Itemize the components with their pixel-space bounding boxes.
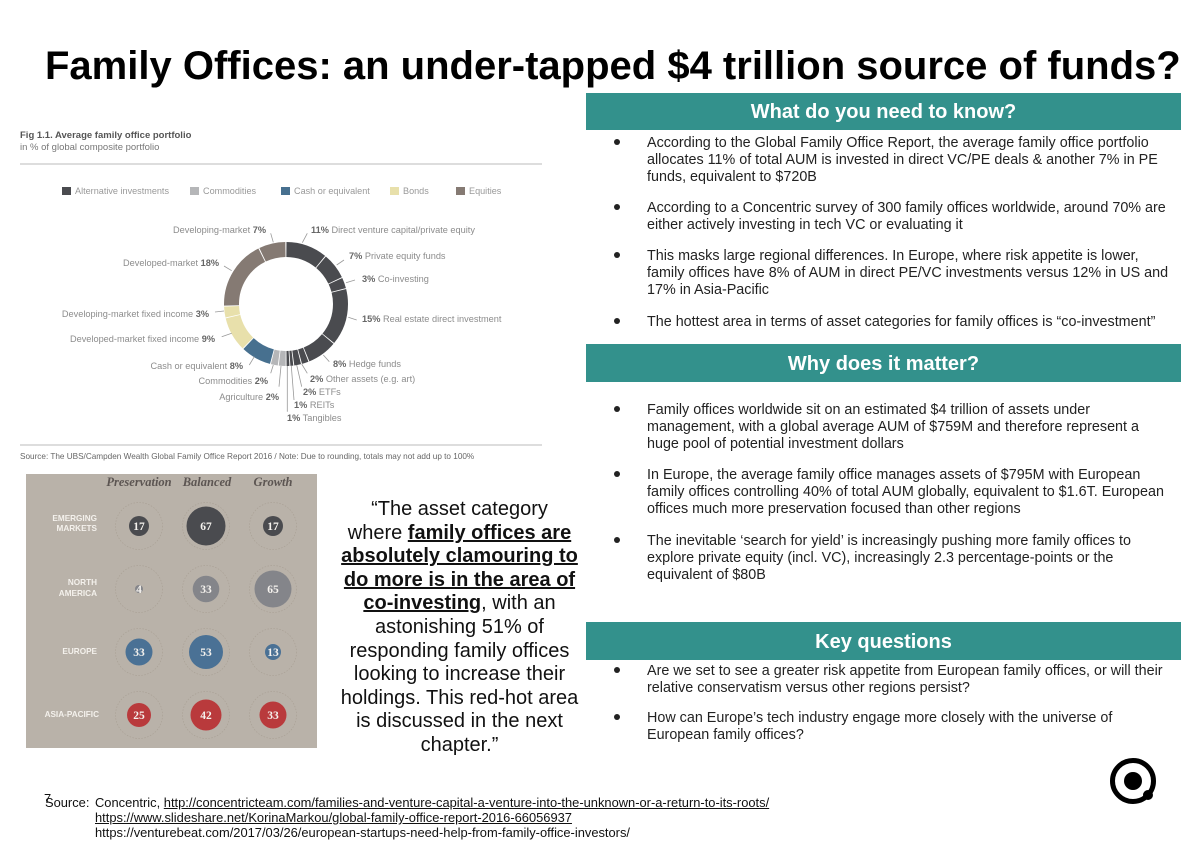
quote text block: responding family offices bbox=[350, 640, 569, 662]
figure heading: in % of global composite portfolio bbox=[20, 142, 159, 153]
bubble values: 42 bbox=[200, 710, 212, 722]
source references: https://www.slideshare.net/KorinaMarkou/global-family-office-report-2016-66056937 bbox=[95, 810, 572, 825]
bullet: regional differences: This masks large regional differences. In Europe, where risk appetite is lower, bbox=[647, 248, 1139, 264]
bullet: regional differences: family offices have 8% of AUM in direct PE/VC investments versus 12% in US and bbox=[647, 265, 1168, 281]
donut labels: right: 2% ETFs bbox=[303, 387, 341, 397]
bullet: engagement question: European family offices? bbox=[647, 727, 804, 743]
donut labels: right: 2% Other assets (e.g. art) bbox=[310, 374, 415, 384]
donut labels: right: 1% Tangibles bbox=[287, 413, 342, 423]
donut labels: right: 1% REITs bbox=[294, 400, 335, 410]
title: Family Offices: an under-tapped $4 trillion source of funds? bbox=[45, 44, 1181, 88]
row labels: MARKETS bbox=[57, 524, 98, 533]
bubble values: 53 bbox=[200, 647, 212, 659]
quote text block: astonishing 51% of bbox=[375, 616, 544, 638]
row labels: EUROPE bbox=[62, 647, 98, 656]
bullet: search for yield: explore private equity (incl. VC), increasingly 2.3 percentage-points or the bbox=[647, 550, 1113, 566]
heading: key questions bbox=[586, 622, 1181, 660]
quote text block: where family offices are bbox=[348, 522, 571, 544]
donut labels: right: 11% Direct venture capital/private equity bbox=[311, 225, 475, 235]
bullet: regional differences: 17% in Asia-Pacific bbox=[647, 282, 769, 298]
page number: 7 bbox=[44, 791, 51, 806]
bullet: regional differences bbox=[614, 248, 1168, 298]
heading: what do you need to know: What do you need to know? bbox=[751, 101, 1016, 123]
donut labels: right: 3% Co-investing bbox=[362, 274, 429, 284]
row labels: ASIA-PACIFIC bbox=[45, 710, 99, 719]
donut chart bbox=[232, 250, 340, 358]
bullet: worldwide assets bbox=[614, 402, 1139, 452]
bullet: engagement question bbox=[614, 710, 1112, 743]
bullet: average portfolio allocation bbox=[614, 135, 1158, 185]
donut labels: left: Developing-market fixed income 3% bbox=[62, 309, 209, 319]
quote text block: absolutely clamouring to bbox=[341, 545, 578, 567]
column headings: Preservation bbox=[106, 475, 172, 489]
bullet: Concentric survey: either actively investing in tech VC or evaluating it bbox=[647, 217, 963, 233]
bullet: co-investment: The hottest area in terms of asset categories for family offices is “co-investment” bbox=[647, 314, 1155, 330]
donut labels: left: Cash or equivalent 8% bbox=[151, 361, 243, 371]
bubble values: 33 bbox=[200, 584, 212, 596]
heading: why does it matter bbox=[586, 344, 1181, 382]
donut labels: left: Agriculture 2% bbox=[219, 392, 279, 402]
donut labels: left: Developed-market fixed income 9% bbox=[70, 334, 215, 344]
quote text block: holdings. This red-hot area bbox=[341, 687, 578, 709]
donut labels: right: 15% Real estate direct investment bbox=[362, 314, 502, 324]
icon: logo bbox=[1110, 758, 1156, 804]
bullet: search for yield: The inevitable ‘search for yield’ is increasingly pushing more family offices to bbox=[647, 533, 1131, 549]
bullet: risk appetite question bbox=[614, 663, 1163, 696]
row labels: AMERICA bbox=[59, 589, 97, 598]
quote text block: chapter.” bbox=[421, 734, 498, 756]
heading: key questions: Key questions bbox=[815, 631, 952, 653]
bullet: average portfolio allocation: allocates 11% of total AUM is invested in direct VC/PE deals & another 7% in PE bbox=[647, 152, 1158, 168]
source references: Source: bbox=[45, 795, 89, 810]
bubble values: 17 bbox=[267, 521, 279, 533]
column headings bbox=[106, 475, 292, 489]
donut labels: left: Developing-market 7% bbox=[173, 225, 266, 235]
donut labels: left bbox=[62, 225, 279, 402]
legend: Commodities bbox=[203, 186, 257, 196]
bullet: engagement question: How can Europe’s tech industry engage more closely with the universe of bbox=[647, 710, 1112, 726]
column headings: Balanced bbox=[182, 475, 232, 489]
row labels bbox=[45, 514, 99, 719]
bullet: Concentric survey: According to a Concentric survey of 300 family offices worldwide, around 70% are bbox=[647, 200, 1166, 216]
heading: why does it matter: Why does it matter? bbox=[788, 353, 979, 375]
row labels: EMERGING bbox=[52, 514, 97, 523]
bullet: risk appetite question: Are we set to see a greater risk appetite from European family offices, or will their bbox=[647, 663, 1163, 679]
figure heading: Fig 1.1. Average family office portfolio bbox=[20, 130, 192, 141]
source references: https://venturebeat.com/2017/03/26/european-startups-need-help-from-family-office-investors/ bbox=[95, 825, 630, 840]
donut labels: left: Commodities 2% bbox=[199, 376, 268, 386]
quote text block: do more is in the area of bbox=[344, 569, 575, 591]
bubble values: 33 bbox=[133, 647, 145, 659]
source references: Concentric, http://concentricteam.com/families-and-venture-capital-a-venture-into-the-unknown-or-a-return-to-its-roots/ bbox=[95, 795, 769, 810]
bubble values: 17 bbox=[133, 521, 145, 533]
bullet: Europe assets: offices much more preservation focused than other regions bbox=[647, 501, 1021, 517]
legend: Alternative investments bbox=[75, 186, 169, 196]
legend: Equities bbox=[469, 186, 502, 196]
leader lines bbox=[215, 233, 357, 412]
bubble values: 65 bbox=[267, 584, 279, 596]
figure source note: Source: The UBS/Campden Wealth Global Family Office Report 2016 / Note: Due to rounding, totals may not add up to 100% bbox=[20, 452, 474, 461]
quote text block: is discussed in the next bbox=[356, 710, 563, 732]
donut labels: right bbox=[287, 225, 502, 423]
bubble values: 13 bbox=[267, 647, 279, 659]
bubbles bbox=[126, 506, 292, 730]
bullet: Europe assets: family offices controlling 40% of total AUM globally, equivalent to $1.6T. European bbox=[647, 484, 1164, 500]
bullet: search for yield bbox=[614, 533, 1131, 583]
dotted outer rings bbox=[116, 502, 296, 738]
source references bbox=[45, 795, 770, 840]
bubble values: 4 bbox=[136, 584, 142, 596]
legend bbox=[62, 186, 502, 196]
quote text block: co-investing, with an bbox=[363, 592, 556, 614]
bubble values: 25 bbox=[133, 710, 145, 722]
bullet: worldwide assets: huge pool of potential investment dollars bbox=[647, 436, 904, 452]
bubble values: 67 bbox=[200, 521, 212, 533]
column headings: Growth bbox=[254, 475, 292, 489]
heading: what do you need to know bbox=[586, 93, 1181, 130]
bullet: average portfolio allocation: funds, equivalent to $720B bbox=[647, 169, 817, 185]
bullet: worldwide assets: management, with a global average AUM of $759M and therefore represent a bbox=[647, 419, 1139, 435]
legend: Cash or equivalent bbox=[294, 186, 370, 196]
donut labels: right: 7% Private equity funds bbox=[349, 251, 446, 261]
legend: Bonds bbox=[403, 186, 429, 196]
bubble values bbox=[133, 521, 279, 722]
panel: regional bubble matrix bbox=[26, 474, 317, 748]
bullet: search for yield: equivalent of $80B bbox=[647, 567, 766, 583]
bullet: Concentric survey bbox=[614, 200, 1166, 233]
quote text block bbox=[341, 498, 578, 756]
row labels: NORTH bbox=[68, 578, 97, 587]
figure heading bbox=[20, 130, 192, 153]
quote text block: looking to increase their bbox=[354, 663, 565, 685]
donut labels: right: 8% Hedge funds bbox=[333, 359, 401, 369]
bubble values: 33 bbox=[267, 710, 279, 722]
bullet: Europe assets bbox=[614, 467, 1164, 517]
quote text block: “The asset category bbox=[371, 498, 548, 520]
panel: portfolio donut chart figure bbox=[20, 130, 542, 461]
bullet: Europe assets: In Europe, the average family office manages assets of $795M with European bbox=[647, 467, 1140, 483]
donut labels: left: Developed-market 18% bbox=[123, 258, 219, 268]
bullet: risk appetite question: relative conservatism versus other regions persist? bbox=[647, 680, 970, 696]
bullet: average portfolio allocation: According to the Global Family Office Report, the average family office portfolio bbox=[647, 135, 1149, 151]
bullet: worldwide assets: Family offices worldwide sit on an estimated $4 trillion of assets under bbox=[647, 402, 1090, 418]
